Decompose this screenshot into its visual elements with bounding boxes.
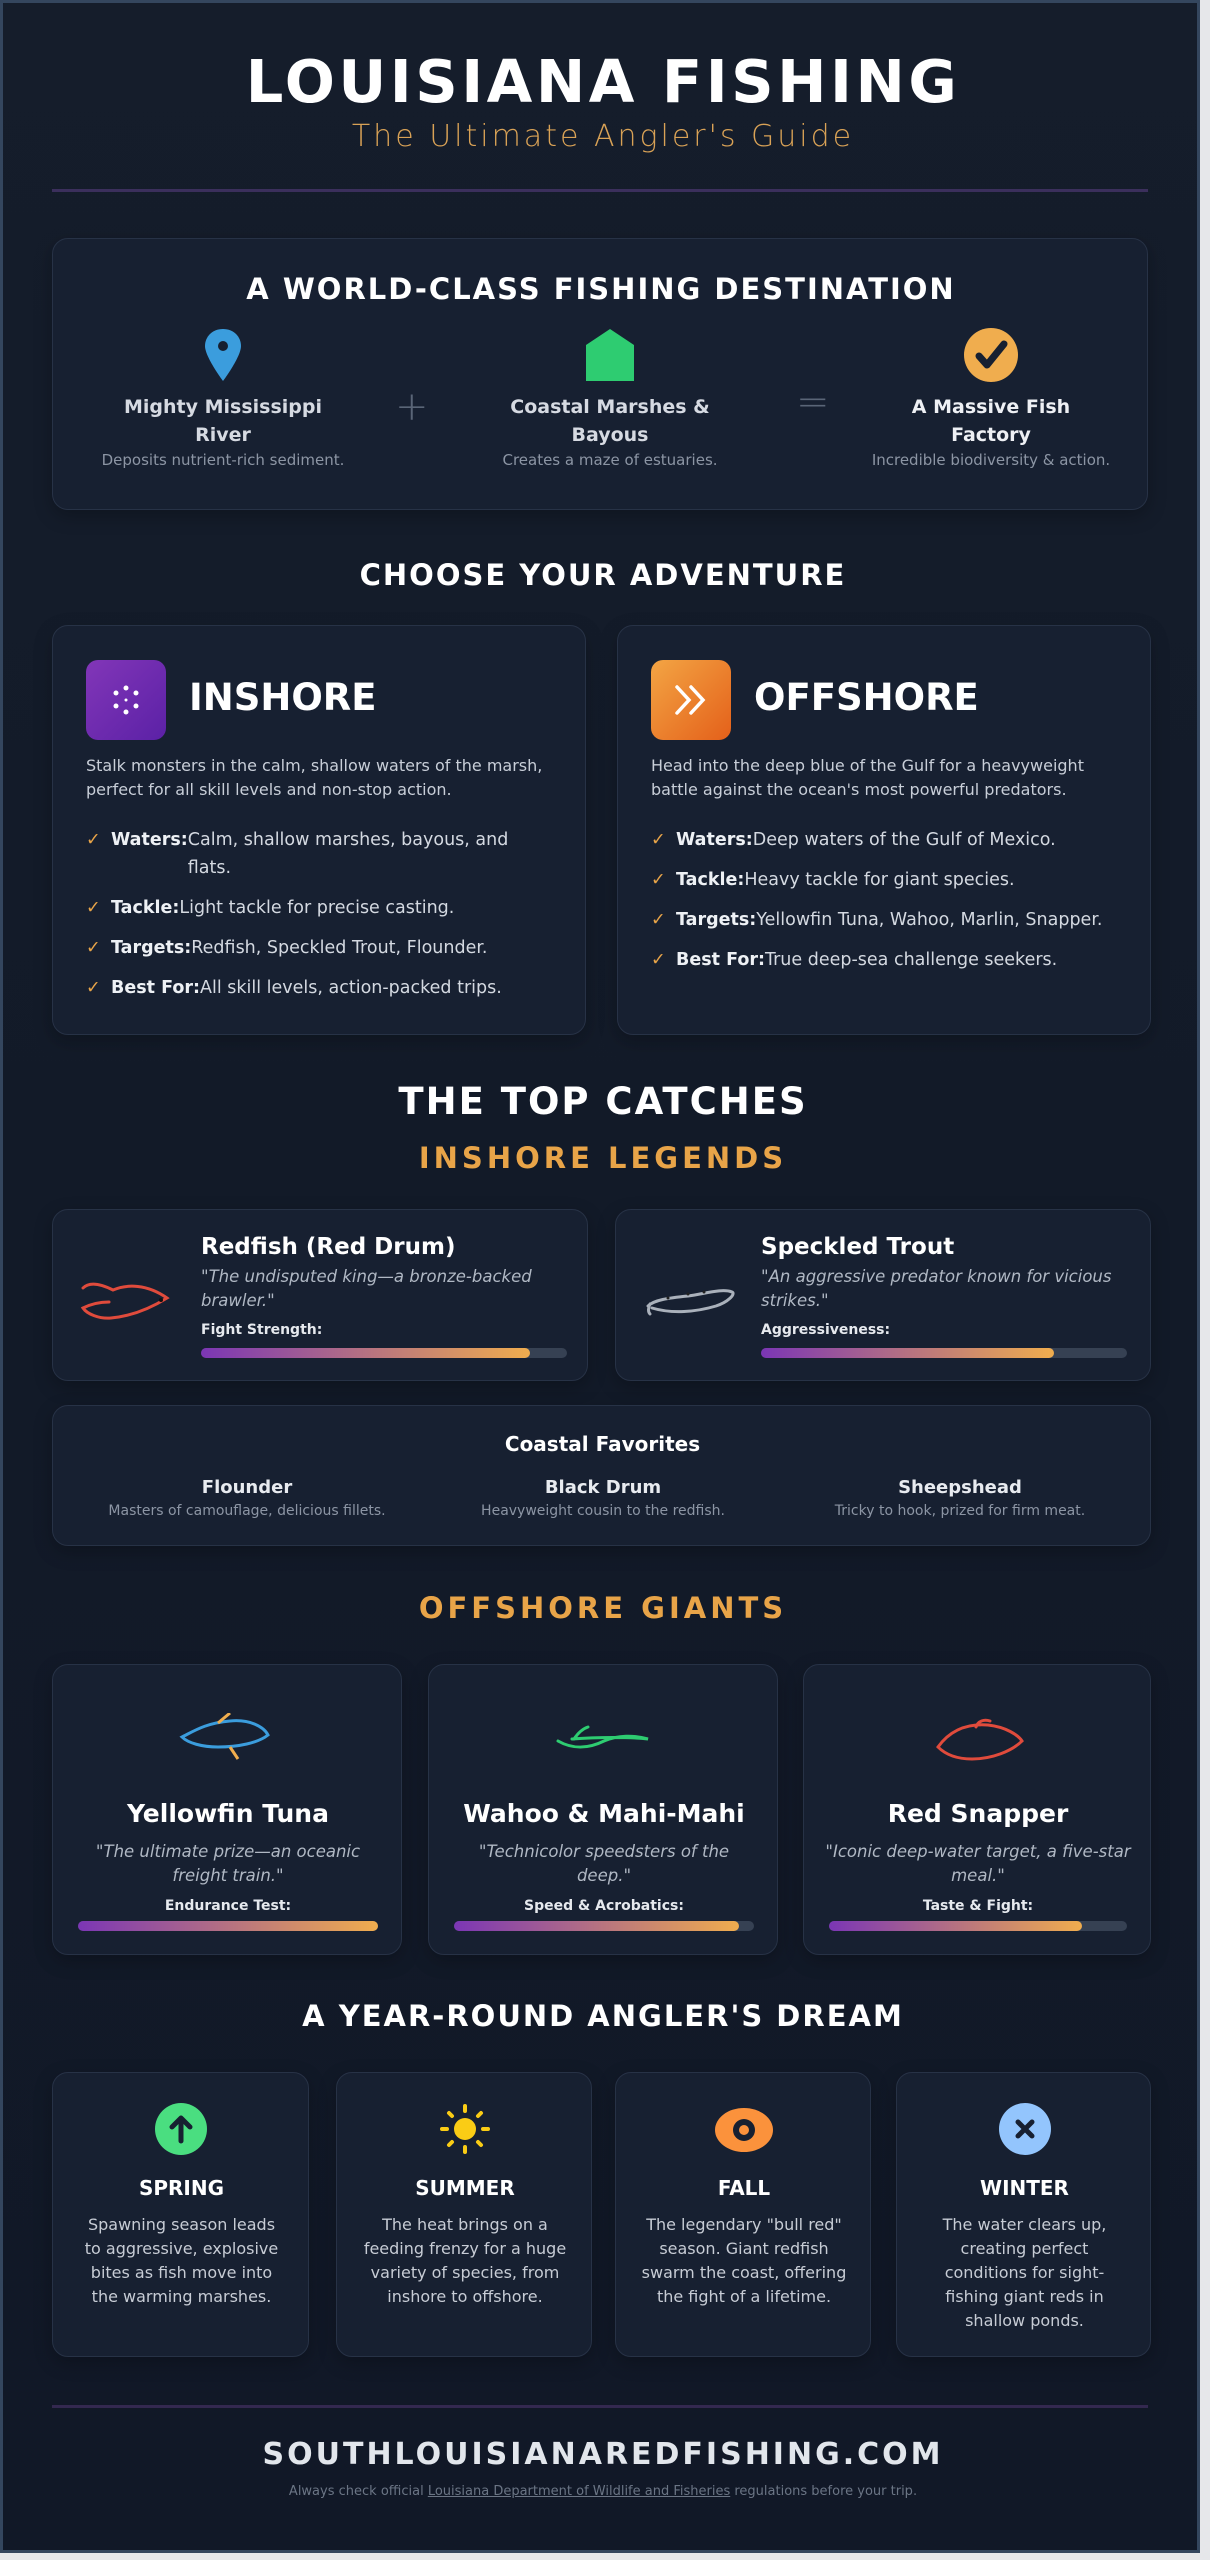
panel: offshore: [617, 625, 1151, 1035]
description: Stalk monsters in the calm, shallow waters of the marsh, perfect for all skill levels and non-stop action.: [86, 756, 542, 799]
checklist: Heavy tackle for giant species.: [744, 870, 1015, 890]
icon: sun: [440, 2104, 490, 2154]
checklist: [86, 830, 508, 998]
checklist: Light tackle for precise casting.: [179, 898, 454, 918]
column: river: [102, 329, 344, 469]
column: river: Deposits nutrient-rich sediment.: [102, 451, 344, 469]
quote: "Technicolor speedsters of the deep.": [479, 1842, 729, 1885]
title: Coastal Favorites: [505, 1432, 700, 1456]
item: sheepshead: [834, 1477, 1085, 1519]
column: marshes: Bayous: [572, 424, 648, 446]
icon: inshore: [86, 660, 166, 740]
checklist: Targets:: [111, 938, 191, 958]
label: Taste & Fight:: [923, 1898, 1033, 1914]
heading: top catches: THE TOP CATCHES: [398, 1080, 808, 1123]
checklist: Best For:: [111, 978, 200, 998]
subheading: offshore giants: OFFSHORE GIANTS: [419, 1591, 787, 1625]
item: flounder: Masters of camouflage, delicious fillets.: [108, 1503, 386, 1519]
icon: winter: [999, 2103, 1051, 2155]
text: The heat brings on a feeding frenzy for a huge variety of species, from inshore to offshore.: [364, 2215, 566, 2306]
card: spring: [52, 2072, 309, 2357]
quote: "Iconic deep-water target, a five-star meal.": [825, 1842, 1131, 1885]
card: redfish: [52, 1209, 588, 1381]
checklist: [651, 830, 1102, 970]
label: Endurance Test:: [165, 1898, 291, 1914]
bar: [761, 1348, 1127, 1358]
item: sheepshead: Sheepshead: [898, 1477, 1022, 1498]
column: fish factory: Factory: [951, 424, 1031, 446]
label: Aggressiveness:: [761, 1322, 890, 1338]
column: marshes: Creates a maze of estuaries.: [502, 451, 718, 469]
item: flounder: [108, 1477, 386, 1519]
item: flounder: Flounder: [202, 1477, 292, 1498]
bar: [78, 1921, 378, 1931]
checklist: Deep waters of the Gulf of Mexico.: [753, 830, 1056, 850]
checklist: Calm, shallow marshes, bayous, and flats.: [188, 830, 508, 878]
column: fish factory: Incredible biodiversity & action.: [872, 451, 1110, 469]
checklist: ✓: [86, 938, 101, 958]
heading: year-round: A YEAR-ROUND ANGLER'S DREAM: [302, 1999, 904, 2033]
icon: marsh: [586, 329, 634, 381]
card: red snapper: [803, 1664, 1151, 1955]
subheading: inshore legends: INSHORE LEGENDS: [419, 1141, 787, 1175]
bar: [829, 1921, 1127, 1931]
title: Redfish (Red Drum): [201, 1234, 455, 1260]
icon: eye: [715, 2108, 773, 2152]
column: marshes: [502, 329, 718, 469]
column: river: River: [195, 424, 251, 446]
title: Red Snapper: [888, 1799, 1068, 1828]
column: fish factory: A Massive Fish: [912, 396, 1070, 418]
checklist: All skill levels, action-packed trips.: [200, 978, 502, 998]
text: The water clears up, creating perfect conditions for sight-fishing giant reds in shallow ponds.: [943, 2215, 1106, 2330]
text: The legendary "bull red" season. Giant redfish swarm the coast, offering the fight of a lifetime.: [642, 2215, 846, 2306]
checklist: Tackle:: [676, 870, 744, 890]
checklist: Waters:: [111, 830, 188, 850]
icon: redfish: [80, 1282, 170, 1320]
title: FALL: [718, 2176, 770, 2200]
quote: "The undisputed king—a bronze-backed brawler.": [201, 1267, 532, 1310]
checklist: ✓: [86, 978, 101, 998]
icon: snapper: [936, 1718, 1024, 1760]
title: Yellowfin Tuna: [127, 1799, 329, 1828]
footer: disclaimer: Always check official Louisiana Department of Wildlife and Fisheries regulations before your trip.: [289, 2484, 917, 2499]
quote: "An aggressive predator known for vicious strikes.": [761, 1267, 1112, 1310]
item: black drum: Black Drum: [545, 1477, 661, 1498]
panel: inshore: [52, 625, 586, 1035]
checklist: ✓: [651, 870, 666, 890]
title: WINTER: [980, 2176, 1069, 2200]
title: Speckled Trout: [761, 1234, 954, 1260]
card: speckled trout: [615, 1209, 1151, 1381]
column: river: Mighty Mississippi: [124, 396, 322, 418]
heading: inshore: INSHORE: [189, 676, 377, 719]
checklist: Yellowfin Tuna, Wahoo, Marlin, Snapper.: [756, 910, 1102, 930]
icon: offshore: [651, 660, 731, 740]
title: SUMMER: [415, 2176, 515, 2200]
title: Wahoo & Mahi-Mahi: [463, 1799, 745, 1828]
checklist: Redfish, Speckled Trout, Flounder.: [191, 938, 488, 958]
checklist: ✓: [86, 830, 101, 850]
card: coastal favorites: [52, 1405, 1151, 1546]
title: LOUISIANA FISHING: [246, 47, 960, 116]
item: sheepshead: Tricky to hook, prized for firm meat.: [835, 1503, 1085, 1519]
equals sign: =: [796, 379, 830, 425]
item: black drum: Heavyweight cousin to the redfish.: [481, 1503, 725, 1519]
plus sign: +: [395, 384, 429, 430]
checklist: ✓: [86, 898, 101, 918]
card: yellowfin tuna: [52, 1664, 402, 1955]
panel: world-class destination: [52, 238, 1148, 510]
heading: offshore: OFFSHORE: [754, 676, 979, 719]
heading: A WORLD-CLASS FISHING DESTINATION: [246, 272, 956, 306]
checklist: True deep-sea challenge seekers.: [765, 950, 1057, 970]
heading: choose your adventure: CHOOSE YOUR ADVENTURE: [360, 558, 846, 592]
bar: [454, 1921, 754, 1931]
checklist: Targets:: [676, 910, 756, 930]
icon: spring arrow: [155, 2103, 207, 2155]
footer: site name: SOUTHLOUISIANAREDFISHING.COM: [263, 2437, 943, 2472]
icon: trout: [646, 1289, 735, 1316]
card: wahoo: [428, 1664, 778, 1955]
checklist: ✓: [651, 830, 666, 850]
title: SPRING: [139, 2176, 224, 2200]
bar: [201, 1348, 567, 1358]
card: fall: [615, 2072, 871, 2357]
checklist: Tackle:: [111, 898, 179, 918]
subtitle: The Ultimate Angler's Guide: [352, 119, 854, 154]
checklist: ✓: [651, 950, 666, 970]
quote: "The ultimate prize—an oceanic freight train.": [96, 1842, 360, 1885]
card: summer: [336, 2072, 592, 2357]
label: Fight Strength:: [201, 1322, 322, 1338]
icon: map pin: [205, 329, 241, 381]
column: fish factory: [872, 328, 1110, 469]
icon: tuna: [180, 1713, 270, 1760]
column: marshes: Coastal Marshes &: [510, 396, 710, 418]
icon: wahoo: [556, 1726, 648, 1748]
label: Speed & Acrobatics:: [524, 1898, 684, 1914]
card: winter: [896, 2072, 1151, 2357]
icon: check: [964, 328, 1018, 382]
text: Spawning season leads to aggressive, explosive bites as fish move into the warming marshes.: [85, 2215, 278, 2306]
checklist: Best For:: [676, 950, 765, 970]
description: Head into the deep blue of the Gulf for a heavyweight battle against the ocean's most powerful predators.: [651, 756, 1084, 799]
item: black drum: [481, 1477, 725, 1519]
checklist: ✓: [651, 910, 666, 930]
checklist: Waters:: [676, 830, 753, 850]
